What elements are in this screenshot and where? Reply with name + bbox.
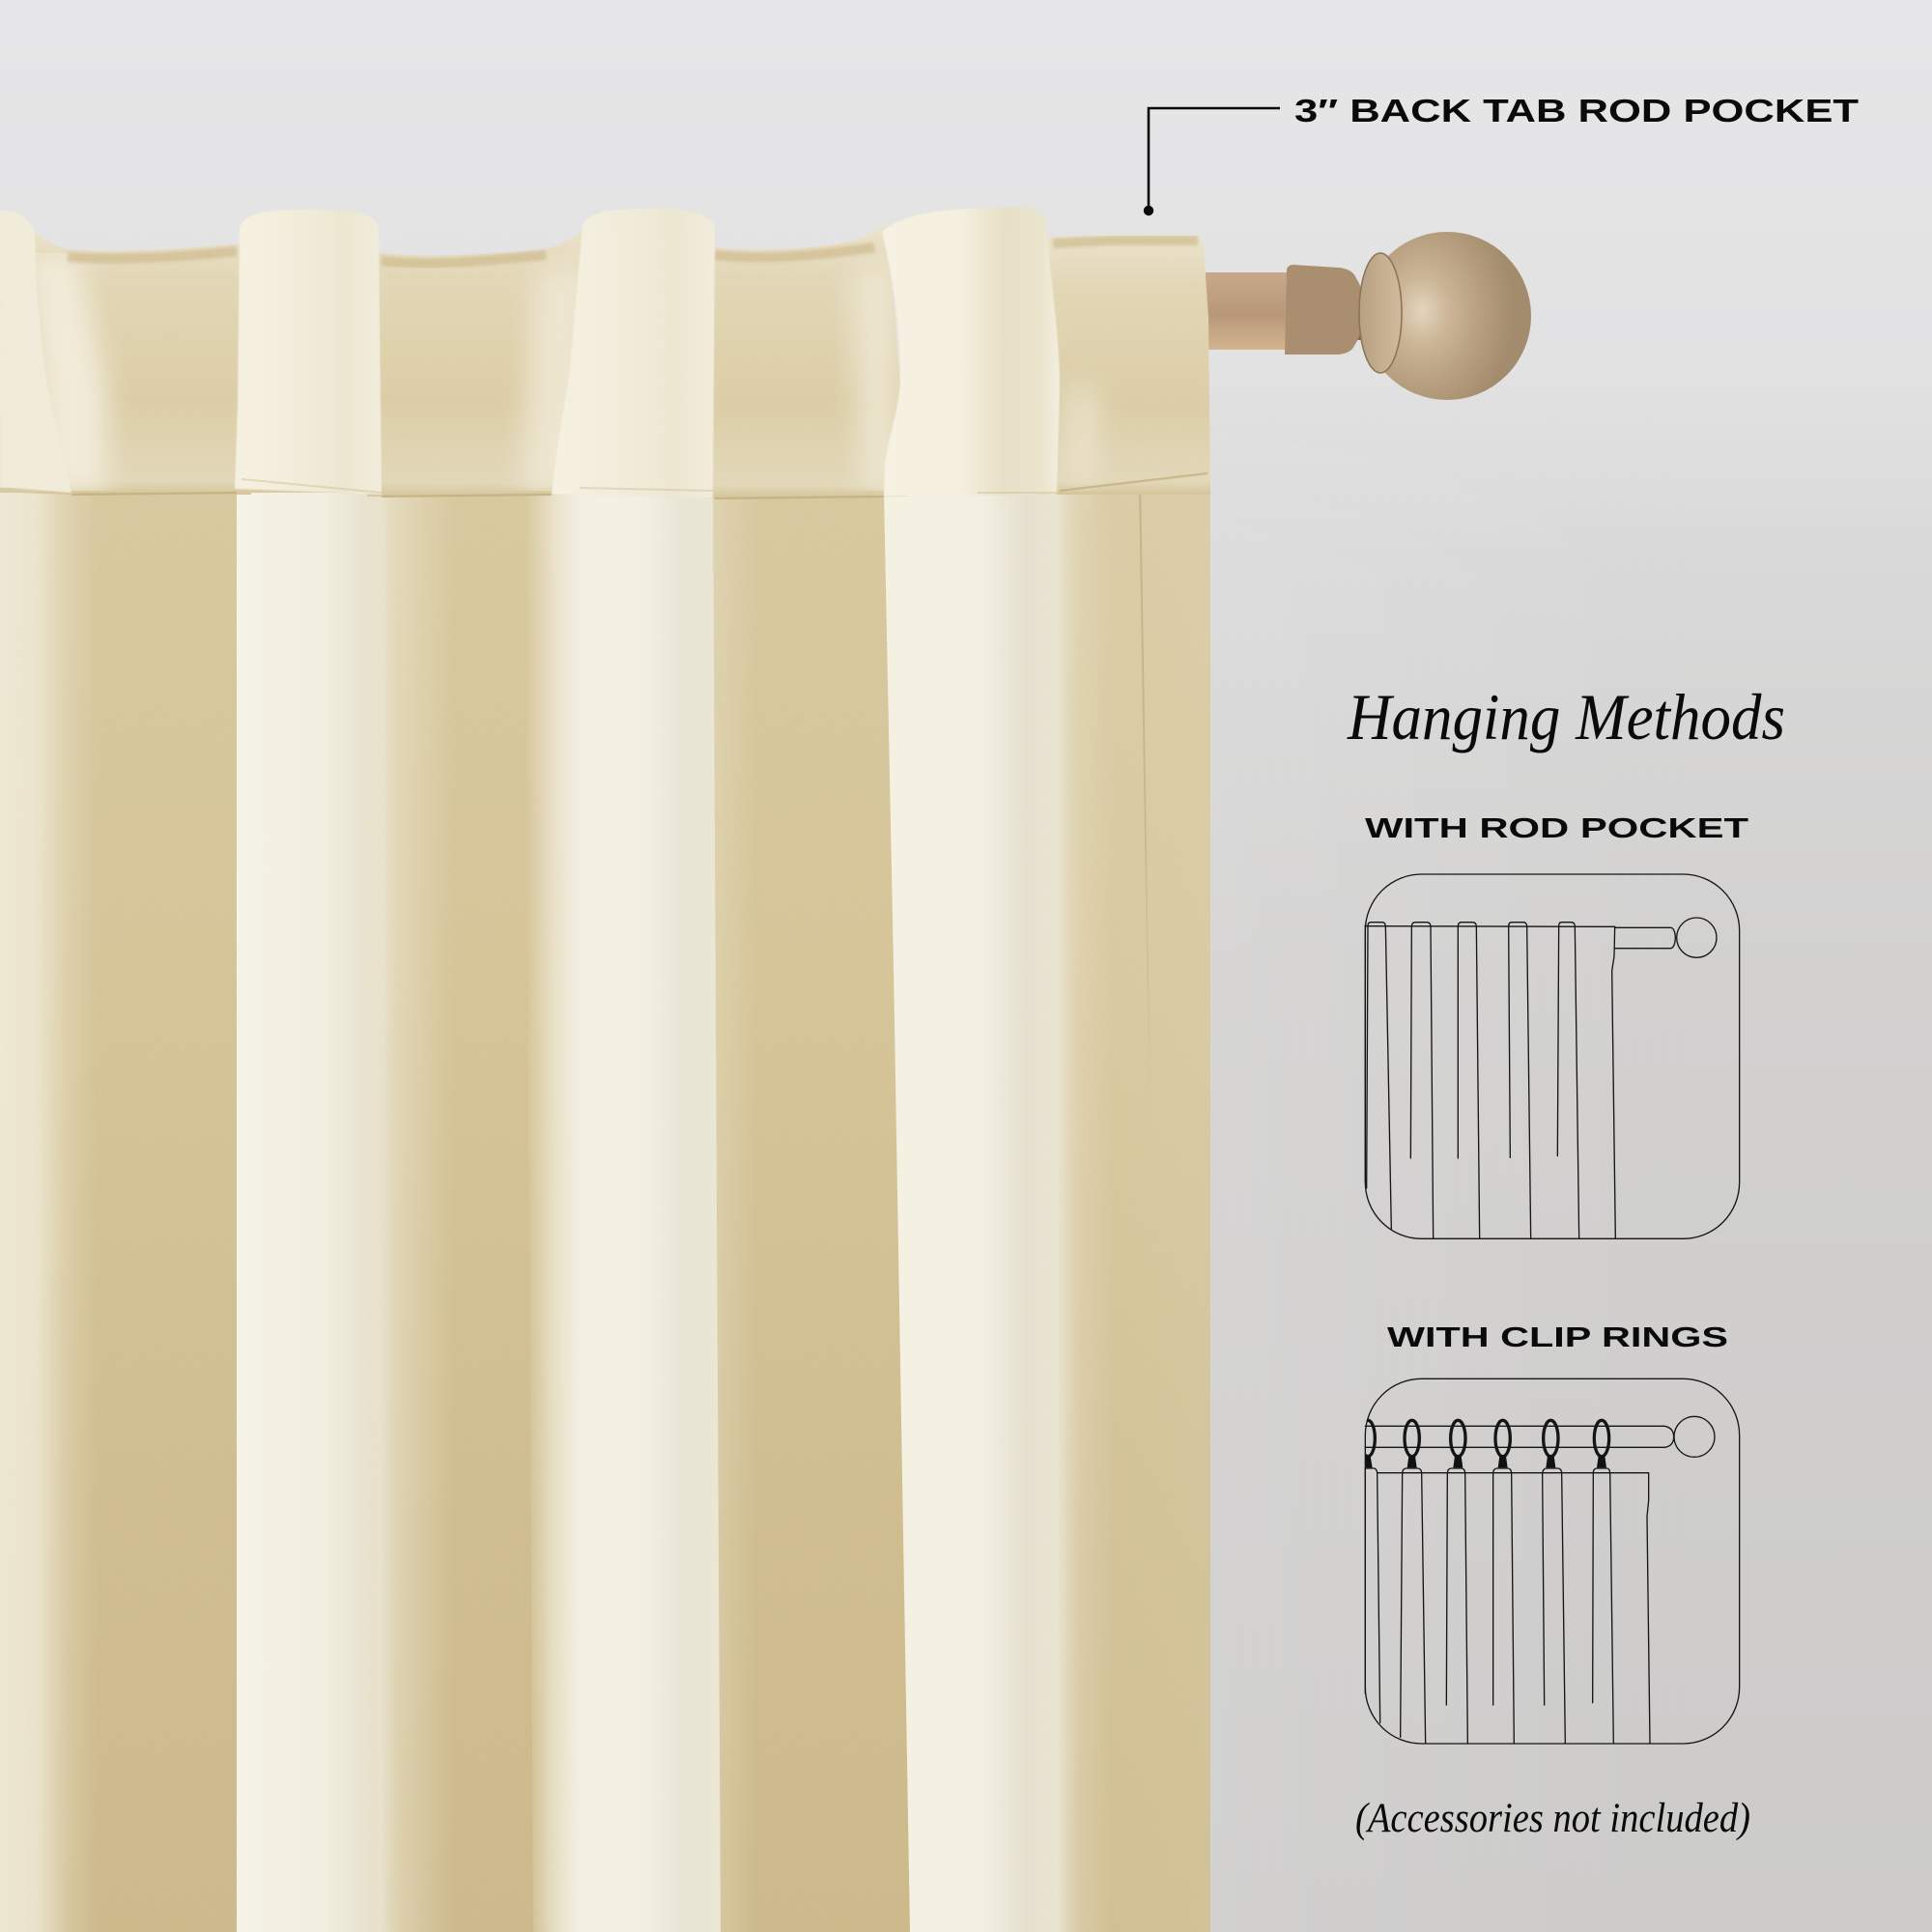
note: accessories not included: (Accessories not included) xyxy=(1355,1796,1750,1841)
top pleat one xyxy=(235,210,382,495)
ball face xyxy=(1359,253,1402,373)
neck xyxy=(1350,288,1368,340)
leader line xyxy=(1149,108,1280,207)
left top fold xyxy=(0,211,71,493)
ball xyxy=(1363,232,1531,400)
label: with clip rings: WITH CLIP RINGS xyxy=(1387,1322,1728,1353)
icon: curtain on rod pocket xyxy=(1365,874,1740,1238)
lower pleat two xyxy=(526,493,721,1932)
fabric grain xyxy=(0,232,1210,1932)
leader dot xyxy=(1144,206,1153,215)
top pleat two xyxy=(552,209,715,498)
pocket soft highlights xyxy=(29,253,1096,493)
pocket right panel xyxy=(1034,235,1210,495)
top pleat three xyxy=(882,207,1060,497)
collar xyxy=(1285,265,1364,355)
lower pleat three xyxy=(884,493,1080,1932)
pocket hems xyxy=(68,241,1198,263)
lower fabric base xyxy=(0,488,1210,1932)
pocket gather two xyxy=(367,224,589,497)
label: with rod pocket: WITH ROD POCKET xyxy=(1365,813,1748,844)
rod xyxy=(1203,272,1294,350)
soft fold shading xyxy=(0,493,1210,1932)
pocket gather one xyxy=(17,224,251,495)
callout: rod pocket label xyxy=(1144,93,1859,215)
label text: 3″ BACK TAB ROD POCKET xyxy=(1294,93,1859,128)
lower pleat one xyxy=(237,493,398,1932)
curtain panel xyxy=(0,207,1210,1932)
seam on right panel xyxy=(1130,251,1151,1111)
heading: hanging methods: Hanging Methods xyxy=(1347,680,1785,753)
pocket gather three xyxy=(705,224,908,498)
curtain rod with ball finial xyxy=(1203,232,1531,400)
pocket stitch lines xyxy=(71,473,1208,498)
icon: curtain on clip rings xyxy=(1361,1378,1740,1744)
pleat stitch lines xyxy=(242,479,1058,493)
